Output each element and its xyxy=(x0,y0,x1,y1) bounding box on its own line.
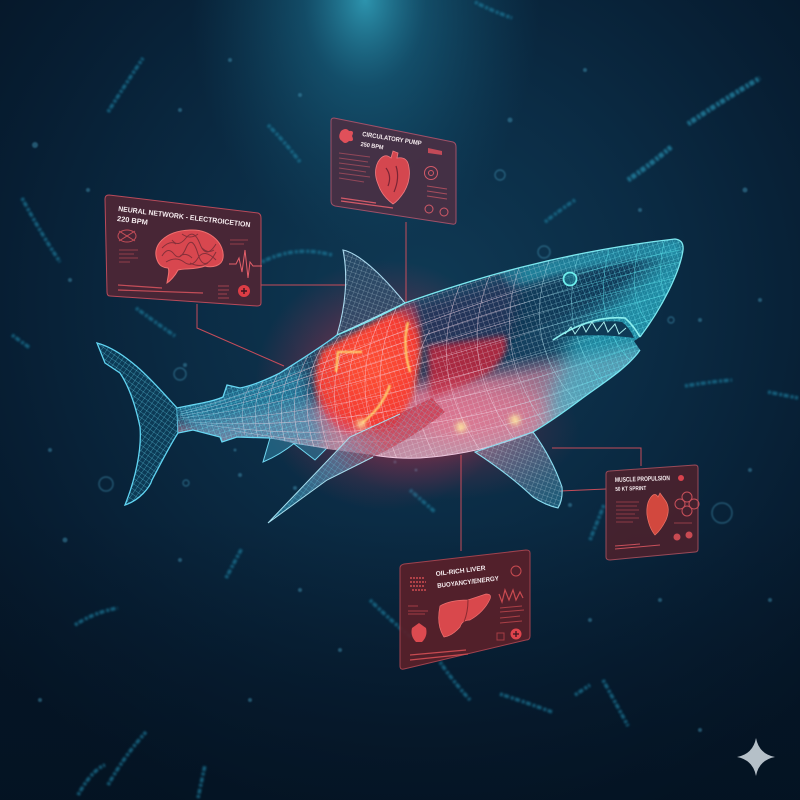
heading: muscle propulsion: 50 KT SPRINT xyxy=(615,486,647,493)
belly hot spots xyxy=(356,415,520,432)
heading: circulatory pump: CIRCULATORY PUMP xyxy=(362,131,423,147)
shark wireframe xyxy=(97,230,690,523)
floating bubbles xyxy=(32,58,772,732)
fin: right pectoral xyxy=(475,432,562,508)
icon: medical badge xyxy=(510,628,522,640)
heading: oil-rich liver: BUOYANCY/ENERGY xyxy=(437,575,500,590)
connector lines xyxy=(197,222,641,551)
bright head shading xyxy=(540,235,690,435)
small figures xyxy=(674,532,692,540)
icon: droplet shield xyxy=(412,623,426,642)
mouth with teeth xyxy=(557,321,634,338)
eye xyxy=(564,272,576,286)
fin: dorsal xyxy=(337,250,405,335)
fin: left pectoral xyxy=(268,398,445,523)
icon: brain xyxy=(156,230,223,283)
heading: oil-rich liver: OIL-RICH LIVER xyxy=(435,565,486,578)
heading: oil-rich liver xyxy=(435,563,500,590)
peduncle cyan shading xyxy=(170,365,325,445)
panel: circulatory pump xyxy=(331,118,456,224)
icon: liver xyxy=(439,594,490,637)
heading: neural network: NEURAL NETWORK - ELECTROICETION xyxy=(118,204,251,229)
purple flank haze xyxy=(415,275,520,345)
dark head dorsal patch xyxy=(511,266,637,338)
panel: oil-rich liver xyxy=(400,550,530,669)
icon: medical badge xyxy=(238,285,250,297)
cyan mesh texture xyxy=(177,240,682,450)
small glyphs and text bars xyxy=(118,230,248,298)
heading: circulatory pump xyxy=(360,131,423,157)
heading: muscle propulsion xyxy=(615,475,671,493)
icon: red cluster xyxy=(339,129,353,143)
body outline xyxy=(177,239,683,458)
red internal organ: heart region xyxy=(315,300,421,435)
heading: neural network: 220 BPM xyxy=(117,214,148,227)
icon: pulse trace xyxy=(229,250,262,278)
mesh contour lines xyxy=(180,238,680,465)
glyphs and bars xyxy=(408,566,524,660)
icon: muscle heart xyxy=(647,493,668,535)
icon: sparkle watermark xyxy=(737,738,775,776)
icon: clover outline xyxy=(615,475,699,549)
red glow behind shark xyxy=(255,260,580,510)
panel: muscle propulsion xyxy=(606,465,699,560)
heading: circulatory pump: 250 BPM xyxy=(360,142,384,151)
dial and glyphs xyxy=(339,148,448,216)
yellow hot veins xyxy=(336,322,410,423)
jaw highlight xyxy=(553,318,640,340)
shark body xyxy=(177,239,683,458)
pink mesh texture xyxy=(293,256,588,458)
icon: heart xyxy=(376,151,409,204)
body internals xyxy=(170,230,690,470)
panel: neural network xyxy=(105,195,262,306)
top head cyan rim xyxy=(500,238,680,288)
heading: muscle propulsion: MUSCLE PROPULSION xyxy=(615,475,670,484)
fin: rear ventral xyxy=(263,438,327,462)
fin: tail xyxy=(97,343,178,505)
teeth xyxy=(565,322,626,334)
red internal organ: liver region xyxy=(428,335,507,398)
pink belly organ glow xyxy=(412,384,548,440)
